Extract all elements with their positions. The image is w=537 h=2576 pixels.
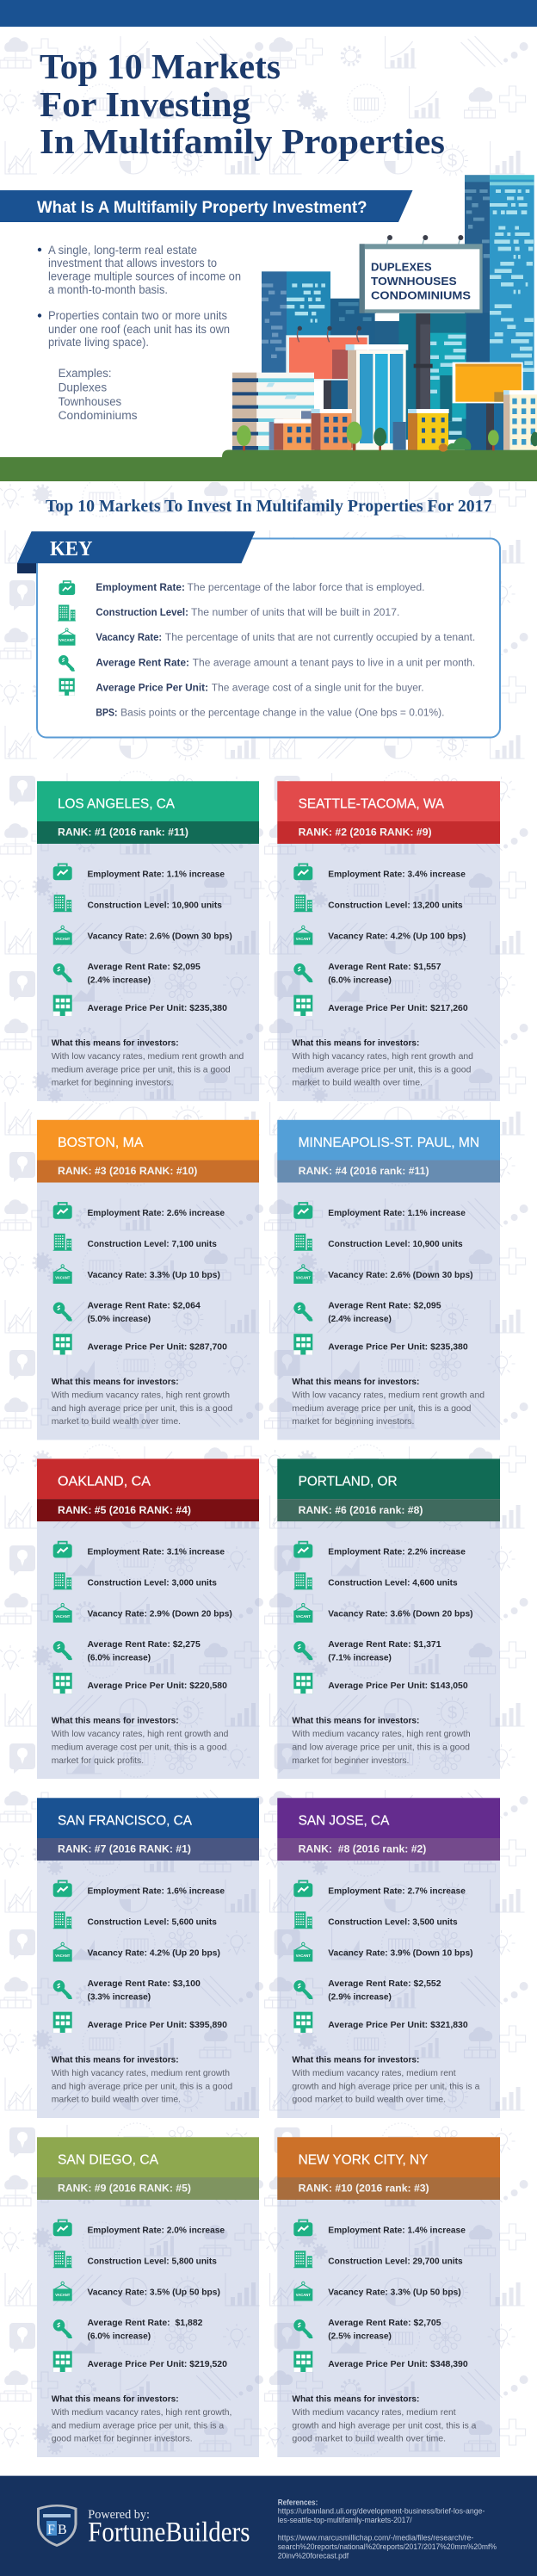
- footer: [0, 2475, 537, 2576]
- bullet list: definition: leverage multiple sources of income on: [48, 270, 241, 282]
- vacancy rate: [293, 1265, 473, 1284]
- tall tower: [465, 175, 534, 450]
- city header: [277, 1458, 500, 1499]
- key row: construction level: [58, 604, 399, 622]
- vacancy rate: VACANT: [55, 1614, 71, 1619]
- employment rate: Employment Rate: 2.2% increase: [328, 1546, 466, 1557]
- key row: average rent rate: The average amount a tenant pays to live in a unit per month.: [193, 658, 475, 668]
- average price per unit: Average Price Per Unit: $321,830: [328, 2020, 468, 2030]
- average rent rate: (2.4% increase): [88, 975, 151, 985]
- large billboard: CONDOMINIUMS: [371, 288, 471, 301]
- average rent rate: Average Rent Rate: $2,095: [88, 962, 201, 972]
- average price per unit: [293, 1334, 468, 1355]
- panel: key: [17, 531, 500, 737]
- panel: Boston, MA: [37, 1120, 259, 1440]
- construction level: Construction Level: 7,100 units: [88, 1239, 217, 1249]
- what this means for investors: [52, 1715, 229, 1766]
- rank band: RANK: #2 (2016 RANK: #9): [299, 828, 432, 839]
- tiered white building: [232, 373, 314, 450]
- vacancy rate: Vacancy Rate: 3.5% (Up 50 bps): [88, 2287, 220, 2297]
- vacancy rate: Vacancy Rate: 3.6% (Down 20 bps): [328, 1608, 473, 1619]
- average price per unit: [53, 1673, 227, 1694]
- rank band: [277, 1161, 500, 1183]
- trees and bushes: [237, 422, 537, 452]
- small orange building: [274, 419, 315, 450]
- panel: Minneapolis-St. Paul, MN: [277, 1120, 500, 1440]
- city header: [277, 1798, 500, 1838]
- rank band: RANK: #1 (2016 rank: #11): [58, 828, 188, 839]
- construction level: [53, 895, 222, 912]
- average price per unit: Average Price Per Unit: $287,700: [88, 1342, 227, 1353]
- key row: vacancy rate: VACANT: [59, 638, 75, 642]
- what this means for investors: With medium vacancy rates, high rent growth: [52, 1390, 230, 1401]
- references: [278, 2498, 497, 2560]
- rank band: RANK: #8 (2016 rank: #2): [299, 1845, 427, 1855]
- city header: [37, 781, 259, 821]
- rank band: RANK: #7 (2016 RANK: #1): [58, 1845, 191, 1855]
- employment rate: [53, 864, 225, 880]
- what this means for investors: medium average price per unit, this is a good: [292, 1403, 472, 1414]
- construction level: [293, 895, 463, 912]
- average price per unit: Average Price Per Unit: $217,260: [328, 1003, 468, 1013]
- ground: [0, 449, 537, 481]
- what this means for investors: [292, 2393, 477, 2444]
- construction level: [293, 1234, 463, 1251]
- employment rate: Employment Rate: 3.1% increase: [88, 1546, 225, 1557]
- city header: [37, 2137, 259, 2177]
- red billboard: [286, 326, 369, 412]
- average rent rate: [53, 1300, 201, 1324]
- panel: San Diego, CA: [37, 2137, 259, 2457]
- average price per unit: [293, 1673, 468, 1694]
- key row: bps: BPS:: [96, 708, 117, 718]
- what this means for investors: With low vacancy rates, medium rent growth and: [52, 1051, 244, 1062]
- what this means for investors: [292, 1377, 485, 1427]
- average rent rate: [53, 1978, 201, 2002]
- key banner: KEY: [50, 538, 93, 560]
- key row: average price per unit: The average cost of a single unit for the buyer.: [212, 683, 424, 693]
- employment rate: [53, 2220, 225, 2236]
- rank band: [37, 1161, 259, 1183]
- average rent rate: (6.0% increase): [328, 975, 392, 985]
- what this means for investors: market to build wealth over time.: [52, 2095, 181, 2105]
- vacancy rate: Vacancy Rate: 3.3% (Up 10 bps): [88, 1270, 220, 1280]
- panel: New York City, NY: [277, 2137, 500, 2457]
- what this means for investors: With medium vacancy rates, high rent growth,: [52, 2407, 231, 2418]
- rank band: RANK: #5 (2016 RANK: #4): [58, 1506, 191, 1516]
- large billboard: DUPLEXES: [371, 260, 432, 273]
- average price per unit: Average Price Per Unit: $220,580: [88, 1681, 227, 1691]
- ribbon heading: what is a multifamily property investment: [0, 190, 413, 222]
- city header: [37, 1798, 259, 1838]
- what this means for investors: growth and high average per unit cost, this is a: [292, 2420, 477, 2430]
- vacancy rate: [53, 1265, 220, 1284]
- panel: Seattle-Tacoma, WA: [277, 781, 500, 1101]
- what this means for investors: With low vacancy rates, high rent growth and: [52, 1729, 229, 1739]
- panel: Los Angeles, CA: [37, 781, 259, 1101]
- construction level: [53, 1234, 217, 1251]
- what this means for investors: [292, 1715, 471, 1766]
- what this means for investors: and low average price per unit, this is a good: [292, 1742, 470, 1752]
- what this means for investors: What this means for investors:: [52, 2393, 179, 2404]
- construction level: Construction Level: 29,700 units: [328, 2256, 463, 2266]
- vacancy rate: VACANT: [296, 1276, 311, 1280]
- what this means for investors: good market to build wealth over time.: [292, 2095, 446, 2105]
- vacancy rate: Vacancy Rate: 4.2% (Up 20 bps): [88, 1947, 220, 1958]
- key row: average price per unit: [59, 678, 424, 696]
- vacancy rate: [293, 1603, 473, 1623]
- what this means for investors: What this means for investors:: [292, 1377, 419, 1387]
- key row: average price per unit: Average Price Per Unit:: [96, 683, 208, 693]
- city header: PORTLAND, OR: [299, 1474, 398, 1489]
- what this means for investors: What this means for investors:: [292, 2393, 419, 2404]
- mid buildings: [330, 299, 503, 450]
- what this means for investors: With medium vacancy rates, medium rent: [292, 2407, 456, 2418]
- bullet list: definition: A single, long-term real estate: [48, 244, 197, 257]
- what this means for investors: [292, 1037, 473, 1088]
- construction level: Construction Level: 3,500 units: [328, 1917, 458, 1927]
- what this means for investors: What this means for investors:: [292, 1037, 419, 1048]
- construction level: Construction Level: 10,900 units: [88, 900, 222, 910]
- construction level: [53, 1572, 217, 1589]
- vacancy rate: VACANT: [296, 1954, 311, 1958]
- average rent rate: Average Rent Rate: $2,064: [88, 1301, 201, 1311]
- vacancy rate: Vacancy Rate: 3.3% (Up 50 bps): [328, 2287, 461, 2297]
- panel: San Jose, CA: [277, 1798, 500, 2118]
- employment rate: Employment Rate: 2.7% increase: [328, 1886, 466, 1896]
- powered by: FortuneBuilders: [88, 2517, 250, 2548]
- city header: SEATTLE-TACOMA, WA: [299, 796, 445, 811]
- vacancy rate: VACANT: [55, 1276, 71, 1280]
- average rent rate: (6.0% increase): [88, 2331, 151, 2341]
- key row: average rent rate: [59, 655, 475, 672]
- city header: SAN FRANCISCO, CA: [58, 1813, 193, 1828]
- bullet list: definition: investment that allows investors to: [48, 257, 217, 269]
- what this means for investors: What this means for investors:: [52, 2054, 179, 2065]
- construction level: [293, 2251, 463, 2268]
- references: https://www.marcusmillichap.com/-/media/files/research/re-: [278, 2534, 473, 2542]
- construction level: Construction Level: 4,600 units: [328, 1577, 458, 1588]
- left blue building: [262, 271, 330, 375]
- average rent rate: (5.0% increase): [88, 1314, 151, 1324]
- average rent rate: [293, 962, 441, 985]
- employment rate: Employment Rate: 3.4% increase: [328, 869, 466, 879]
- rank band: RANK: #4 (2016 rank: #11): [299, 1167, 429, 1177]
- what this means for investors: market to build wealth over time.: [52, 1416, 181, 1427]
- vacancy rate: Vacancy Rate: 4.2% (Up 100 bps): [328, 931, 466, 941]
- vacancy rate: VACANT: [296, 2293, 311, 2297]
- panel: Portland, OR: [277, 1458, 500, 1779]
- logo: FortuneBuilders shield: [37, 2505, 77, 2547]
- what this means for investors: market for beginning investors.: [52, 1078, 174, 1088]
- rank band: [37, 1838, 259, 1861]
- city header: NEW YORK CITY, NY: [299, 2152, 428, 2167]
- examples list: [59, 367, 138, 422]
- vacancy rate: [53, 1942, 220, 1961]
- average rent rate: Average Rent Rate: $1,371: [328, 1639, 441, 1650]
- average rent rate: [293, 1300, 441, 1324]
- vacancy rate: VACANT: [55, 1954, 71, 1958]
- rank band: RANK: #9 (2016 RANK: #5): [58, 2184, 191, 2195]
- what this means for investors: With low vacancy rates, medium rent growth and: [292, 1390, 485, 1401]
- what this means for investors: growth and high average price per unit, this is a: [292, 2081, 480, 2091]
- rank band: [37, 1499, 259, 1521]
- employment rate: Employment Rate: 1.6% increase: [88, 1886, 225, 1896]
- construction level: [293, 1572, 458, 1589]
- large billboard: [360, 235, 483, 409]
- employment rate: [293, 1203, 466, 1219]
- construction level: [53, 1911, 217, 1929]
- what this means for investors: medium average price per unit, this is a good: [52, 1064, 231, 1074]
- average rent rate: (2.5% increase): [328, 2331, 392, 2341]
- key row: average rent rate: Average Rent Rate:: [96, 658, 189, 668]
- city header: MINNEAPOLIS-ST. PAUL, MN: [299, 1136, 479, 1150]
- employment rate: Employment Rate: 1.1% increase: [328, 1208, 466, 1218]
- yellow billboard: [453, 362, 523, 450]
- section heading: top 10 markets: Top 10 Markets To Invest In Multifamily Properties For 2017: [46, 497, 492, 516]
- average rent rate: (2.4% increase): [328, 1314, 392, 1324]
- references: https://urbanland.uli.org/development-business/brief-los-ange-: [278, 2507, 485, 2516]
- what this means for investors: good market for beginner investors.: [52, 2434, 193, 2444]
- what this means for investors: What this means for investors:: [52, 1037, 179, 1048]
- what this means for investors: medium average cost per unit, this is a good: [52, 1742, 227, 1752]
- average rent rate: Average Rent Rate: $2,552: [328, 1978, 441, 1989]
- average rent rate: Average Rent Rate: $2,705: [328, 2318, 441, 2328]
- yellow building: [408, 409, 449, 450]
- vacancy rate: Vacancy Rate: 2.6% (Down 30 bps): [328, 1270, 473, 1280]
- vacancy rate: Vacancy Rate: 2.9% (Down 20 bps): [88, 1608, 232, 1619]
- city header: LOS ANGELES, CA: [58, 796, 176, 811]
- references: References:: [278, 2498, 318, 2506]
- vacancy rate: VACANT: [296, 1614, 311, 1619]
- employment rate: [53, 1542, 225, 1557]
- average rent rate: Average Rent Rate: $3,100: [88, 1978, 201, 1989]
- employment rate: [53, 1880, 225, 1897]
- powered by: Powered by:: [88, 2508, 150, 2522]
- what this means for investors: With medium vacancy rates, high rent growth: [292, 1729, 471, 1739]
- employment rate: Employment Rate: 1.4% increase: [328, 2225, 466, 2235]
- employment rate: [293, 864, 466, 880]
- average price per unit: Average Price Per Unit: $348,390: [328, 2359, 468, 2369]
- what this means for investors: What this means for investors:: [292, 1715, 419, 1725]
- what this means for investors: What this means for investors:: [292, 2054, 419, 2065]
- what this means for investors: good market to build wealth over time.: [292, 2434, 446, 2444]
- what this means for investors: With high vacancy rates, high rent growth and: [292, 1051, 473, 1062]
- city header: SAN JOSE, CA: [299, 1813, 390, 1828]
- what this means for investors: and high average price per unit, this is a good: [52, 2081, 232, 2091]
- rank band: [277, 1499, 500, 1521]
- key row: employment rate: [59, 581, 425, 595]
- rank band: [37, 2177, 259, 2200]
- average rent rate: [53, 1639, 201, 1663]
- average price per unit: Average Price Per Unit: $395,890: [88, 2020, 227, 2030]
- what this means for investors: market for beginning investors.: [292, 1416, 414, 1427]
- average rent rate: [293, 1639, 441, 1663]
- average rent rate: (7.1% increase): [328, 1652, 392, 1663]
- cream building: [503, 390, 537, 450]
- what this means for investors: [52, 2054, 232, 2105]
- key row: construction level: Construction Level:: [96, 608, 188, 618]
- what this means for investors: [52, 1037, 244, 1088]
- city header: [37, 1120, 259, 1161]
- city header: [277, 2137, 500, 2177]
- bullet list: definition: Properties contain two or more units: [48, 309, 227, 322]
- what this means for investors: and medium average price per unit, this is a: [52, 2420, 224, 2430]
- average price per unit: Average Price Per Unit: $219,520: [88, 2359, 227, 2369]
- employment rate: Employment Rate: 1.1% increase: [88, 869, 225, 879]
- city header: SAN DIEGO, CA: [58, 2152, 159, 2167]
- vacancy rate: [293, 2282, 461, 2300]
- rank band: RANK: #10 (2016 rank: #3): [299, 2184, 429, 2195]
- examples list: Duplexes: [59, 381, 107, 394]
- construction level: Construction Level: 13,200 units: [328, 900, 463, 910]
- construction level: Construction Level: 10,900 units: [328, 1239, 463, 1249]
- title: For Investing: [40, 84, 251, 124]
- average price per unit: [53, 1334, 227, 1355]
- bullet list: definition: private living space).: [48, 336, 149, 349]
- rank band: [277, 821, 500, 844]
- average price per unit: [293, 2351, 468, 2372]
- rank band: [277, 2177, 500, 2200]
- construction level: Construction Level: 3,000 units: [88, 1577, 217, 1588]
- key banner: [17, 531, 255, 563]
- average rent rate: Average Rent Rate: $2,095: [328, 1301, 441, 1311]
- average price per unit: [293, 995, 468, 1016]
- what this means for investors: [52, 1377, 232, 1427]
- vacancy rate: VACANT: [55, 2293, 71, 2297]
- average rent rate: [53, 2318, 203, 2341]
- what this means for investors: and high average price per unit, this is a good: [52, 1403, 232, 1414]
- key row: vacancy rate: [59, 629, 475, 646]
- title: Top 10 Markets: [40, 46, 281, 86]
- vacancy rate: VACANT: [55, 937, 71, 941]
- key row: bps: Basis points or the percentage change in the value (One bps = 0.01%).: [120, 708, 444, 718]
- vacancy rate: [53, 2282, 220, 2300]
- employment rate: [293, 1880, 466, 1897]
- city header: [37, 1458, 259, 1499]
- key row: construction level: The number of units that will be built in 2017.: [191, 608, 399, 618]
- logo: FortuneBuilders shield: F: [47, 2523, 55, 2537]
- average rent rate: [293, 1978, 441, 2002]
- what this means for investors: What this means for investors:: [52, 1715, 179, 1725]
- rank band: [277, 1838, 500, 1861]
- employment rate: Employment Rate: 2.6% increase: [88, 1208, 225, 1218]
- vacancy rate: VACANT: [296, 937, 311, 941]
- bullet list: definition: a month-to-month basis.: [48, 283, 168, 296]
- bullet list: definition: [38, 244, 241, 349]
- average price per unit: Average Price Per Unit: $235,380: [88, 1003, 227, 1013]
- what this means for investors: market to build wealth over time.: [292, 1078, 423, 1088]
- average rent rate: (6.0% increase): [88, 1652, 151, 1663]
- references: 20inv%20forecast.pdf: [278, 2551, 349, 2560]
- employment rate: Employment Rate: 2.0% increase: [88, 2225, 225, 2235]
- examples list: Examples:: [59, 367, 112, 380]
- references: search%20reports/national%20reports/2017/2017%20mm%20mf%: [278, 2542, 497, 2551]
- rank band: [37, 821, 259, 844]
- what this means for investors: What this means for investors:: [52, 1377, 179, 1387]
- orange building: [312, 409, 352, 450]
- city header: OAKLAND, CA: [58, 1474, 151, 1489]
- title: In Multifamily Properties: [40, 121, 445, 161]
- large billboard: TOWNHOUSES: [371, 275, 457, 288]
- city header: [277, 1120, 500, 1161]
- average rent rate: (2.9% increase): [328, 1991, 392, 2002]
- vacancy rate: [293, 926, 466, 945]
- panel: San Francisco, CA: [37, 1798, 259, 2118]
- what this means for investors: medium average price per unit, this is a good: [292, 1064, 472, 1074]
- average rent rate: [293, 2318, 441, 2341]
- vacancy rate: [53, 1603, 232, 1623]
- city header: [277, 781, 500, 821]
- key row: vacancy rate: The percentage of units that are not currently occupied by a tenant.: [165, 633, 475, 643]
- rank band: RANK: #6 (2016 rank: #8): [299, 1506, 423, 1516]
- illustration: city skyline with billboards: [232, 175, 537, 452]
- construction level: [53, 2251, 217, 2268]
- average price per unit: Average Price Per Unit: $235,380: [328, 1342, 468, 1353]
- vacancy rate: [53, 926, 232, 945]
- vacancy rate: Vacancy Rate: 3.9% (Down 10 bps): [328, 1947, 473, 1958]
- bullet list: definition: under one roof (each unit has its own: [48, 323, 230, 336]
- average price per unit: [293, 2012, 468, 2033]
- average price per unit: Average Price Per Unit: $143,050: [328, 1681, 468, 1691]
- average rent rate: (3.3% increase): [88, 1991, 151, 2002]
- construction level: [293, 1911, 458, 1929]
- vacancy rate: Vacancy Rate: 2.6% (Down 30 bps): [88, 931, 232, 941]
- what this means for investors: [52, 2393, 231, 2444]
- vacancy rate: [293, 1942, 473, 1961]
- key row: employment rate: Employment Rate:: [96, 583, 185, 593]
- average price per unit: [53, 995, 227, 1016]
- average price per unit: [53, 2012, 227, 2033]
- employment rate: [293, 2220, 466, 2236]
- references: les-seattle-top-multifamily-markets-2017/: [278, 2516, 412, 2524]
- city header: BOSTON, MA: [58, 1136, 144, 1150]
- average rent rate: [53, 962, 201, 985]
- employment rate: [293, 1542, 466, 1557]
- panel: Oakland, CA: [37, 1458, 259, 1779]
- average price per unit: [53, 2351, 227, 2372]
- examples list: Townhouses: [59, 395, 121, 408]
- key row: employment rate: The percentage of the labor force that is employed.: [188, 583, 425, 593]
- what this means for investors: With medium vacancy rates, medium rent: [292, 2068, 456, 2078]
- what this means for investors: [292, 2054, 480, 2105]
- average rent rate: Average Rent Rate: $2,275: [88, 1639, 201, 1650]
- rank band: RANK: #3 (2016 RANK: #10): [58, 1167, 198, 1177]
- what this means for investors: market for beginner investors.: [292, 1756, 409, 1766]
- what this means for investors: market for quick profits.: [52, 1756, 144, 1766]
- examples list: Condominiums: [59, 409, 138, 422]
- title: [40, 46, 445, 161]
- average rent rate: Average Rent Rate: $1,882: [88, 2318, 203, 2328]
- average rent rate: Average Rent Rate: $1,557: [328, 962, 441, 972]
- glass building: [343, 344, 408, 450]
- construction level: Construction Level: 5,600 units: [88, 1917, 217, 1927]
- key row: vacancy rate: Vacancy Rate:: [96, 633, 162, 643]
- employment rate: [53, 1203, 225, 1219]
- logo: FortuneBuilders shield: B: [58, 2523, 67, 2537]
- construction level: Construction Level: 5,800 units: [88, 2256, 217, 2266]
- ribbon heading: what is a multifamily property investment: What Is A Multifamily Property Investment?: [37, 199, 367, 217]
- top bar: [0, 0, 537, 27]
- powered by: [88, 2508, 250, 2548]
- what this means for investors: With high vacancy rates, medium rent growth: [52, 2068, 230, 2078]
